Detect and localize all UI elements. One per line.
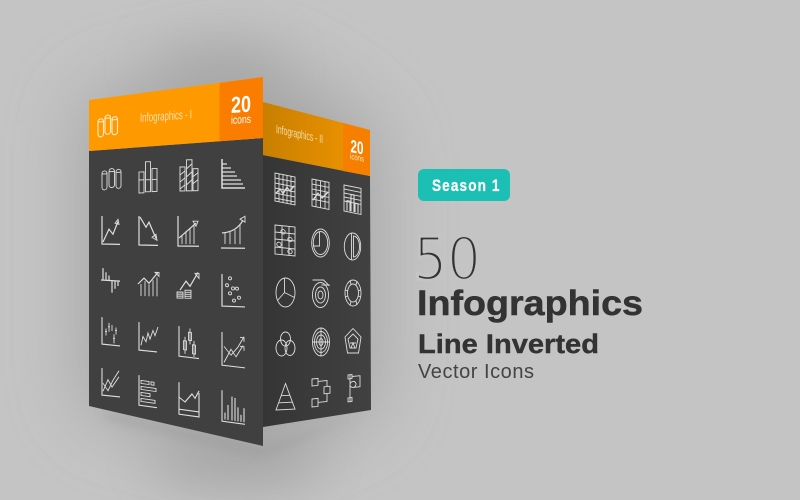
icon: flow diagram — [312, 377, 330, 407]
badge: season: Season 1 — [432, 177, 501, 195]
right badge label: icons — [350, 151, 364, 164]
icon: bars — [139, 161, 157, 193]
icon: thin bars — [222, 390, 245, 424]
panel: right booklet page — [263, 102, 371, 427]
icon: crossing lines — [102, 368, 120, 397]
panel shadows — [85, 40, 375, 486]
icon: gantt bars — [139, 375, 157, 408]
icon: coins trend — [177, 272, 199, 298]
right badge count: 20 — [350, 136, 364, 159]
subheading: vector icons: Vector Icons — [418, 361, 534, 383]
icon: half circle — [344, 233, 361, 260]
icon: pyramid — [276, 383, 295, 410]
icon: grid with wave — [275, 173, 295, 205]
icon: horizontal bars — [222, 159, 245, 188]
icon: wavy line — [139, 322, 158, 352]
left page dark body — [89, 138, 263, 446]
icon: line down — [139, 216, 158, 245]
left page orange header — [89, 77, 263, 151]
icon: hatched bars — [180, 160, 198, 191]
icon: scatter — [222, 274, 245, 307]
right page orange header — [263, 102, 370, 176]
heading: infographics: Infographics — [417, 284, 643, 323]
icon: bar trend — [138, 272, 159, 296]
icon: flag tree — [348, 374, 360, 402]
icon: grid with nodes — [275, 225, 295, 256]
icon: line up — [102, 216, 120, 244]
icon: pie chart — [276, 278, 295, 307]
panel: left booklet page — [89, 77, 263, 446]
icon: grid with bars — [344, 185, 361, 214]
icon: pentagon — [345, 328, 361, 353]
left badge count: 20 — [231, 91, 251, 118]
icon: cylinders — [102, 168, 121, 190]
icon: pie quarter — [312, 229, 329, 257]
left badge label: icons — [231, 114, 251, 127]
right page dark body — [263, 155, 371, 427]
icon: double trend — [222, 332, 245, 368]
icon: area chart — [179, 382, 199, 417]
icon: segmented ring — [345, 280, 361, 306]
icon: candlesticks — [179, 326, 199, 359]
left page icon grid — [101, 159, 245, 424]
icon: header cylinders — [98, 114, 118, 137]
icon: curve bars — [221, 216, 245, 248]
heading: line inverted: Line Inverted — [418, 329, 599, 359]
icon: up down bars — [101, 268, 120, 293]
icon: grid with line — [312, 179, 329, 209]
icon: venn circles — [276, 332, 295, 356]
right page title: Infographics - II — [276, 122, 323, 146]
right page icon grid — [275, 173, 361, 410]
icon: plus scatter — [102, 317, 120, 346]
left page title: Infographics - I — [140, 107, 192, 125]
right page badge — [343, 123, 370, 176]
left page badge — [220, 77, 263, 141]
number 50: 50 — [414, 225, 481, 294]
icon: bars up — [178, 216, 199, 246]
icon: radar target — [312, 328, 330, 356]
icon: spiral ring — [312, 280, 330, 308]
badge: season — [418, 169, 510, 201]
